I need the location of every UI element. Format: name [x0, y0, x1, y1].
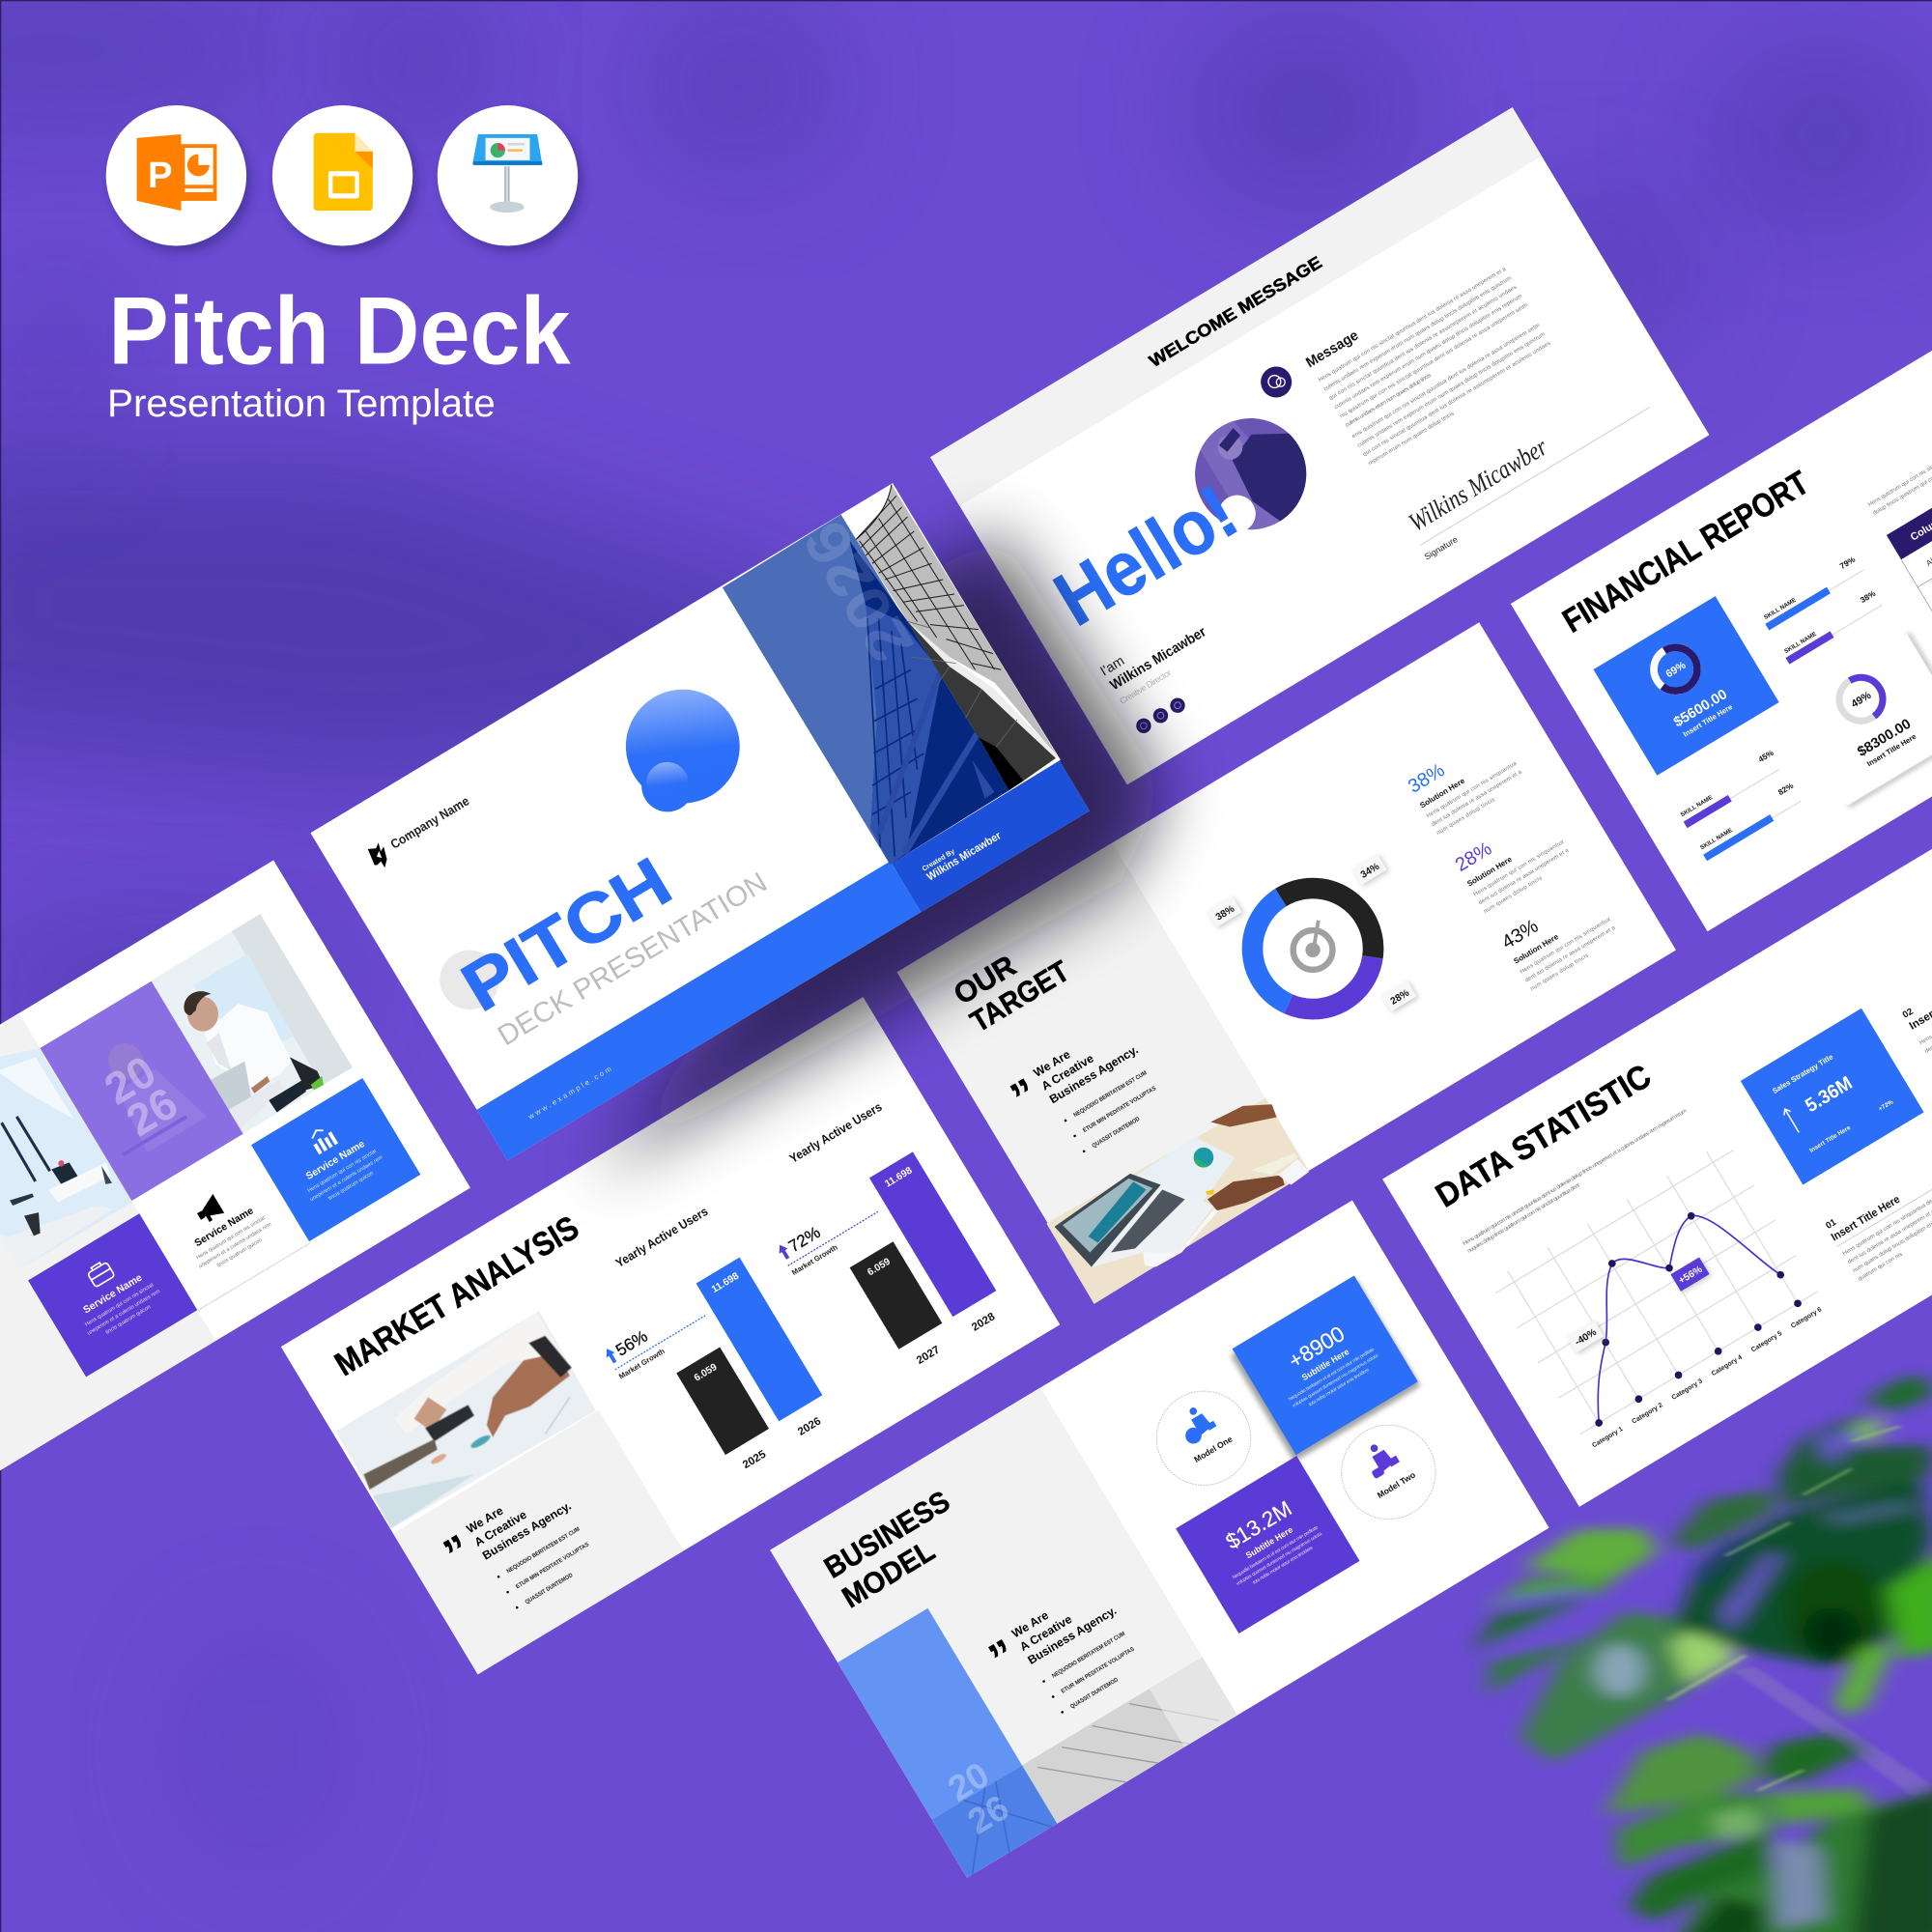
- callout plus 56: [1670, 1257, 1712, 1293]
- quote block: Business Agency.: [1026, 1604, 1119, 1667]
- portrait circle: [1195, 418, 1306, 529]
- stat 28 percent: Hens quatrum qui con nis sinquantua: [1473, 839, 1566, 898]
- skill bar 45 percent: 45%: [1756, 748, 1776, 764]
- plant foliage: [1471, 1377, 1932, 1932]
- blue strategy card: Sales Strategy Title: [1771, 1052, 1834, 1095]
- target title: OUR: [948, 949, 1022, 1011]
- callout 38 percent: [1207, 895, 1244, 929]
- skill bar 38 percent: [1777, 588, 1885, 665]
- line chart: Category 6: [1790, 1306, 1823, 1330]
- cover watermark year: 2026: [789, 509, 926, 674]
- line chart: Category 1: [1591, 1426, 1625, 1449]
- photo of man at laptop: [150, 914, 353, 1135]
- service card purple: [28, 1213, 197, 1377]
- stat 38 percent: Hens quatrum qui con nis sinquantua: [1426, 760, 1519, 819]
- quote block: We Are: [1031, 1047, 1073, 1080]
- quote block: Business Agency.: [1047, 1042, 1141, 1106]
- cover photo: skyscraper: [723, 485, 1061, 865]
- bar chart right: 2028: [970, 1311, 998, 1334]
- icon: briefcase: [86, 1260, 115, 1288]
- cover drop shadow: [591, 529, 1164, 1177]
- message label: Message: [1303, 327, 1361, 371]
- message text: Hens quistrum qui con nis sinctat quuntiua dent ius dolenia re assa uneperem et a: [1318, 267, 1508, 384]
- stat 28 percent: Solution Here: [1465, 855, 1514, 889]
- service card white: tincis quatrum quicon: [216, 1237, 263, 1268]
- stat 28 percent: [1452, 804, 1576, 915]
- quote block: NEQUODIO BERITATEM EST CUM: [505, 1526, 582, 1575]
- office photo: [0, 1048, 132, 1269]
- stat 38 percent: 38%: [1405, 759, 1448, 798]
- blue strategy card: +72%: [1878, 1098, 1895, 1113]
- business title: MODEL: [837, 1533, 941, 1614]
- blue value card: +8900: [1284, 1321, 1349, 1374]
- callouts on donut: [1207, 820, 1453, 1068]
- bar chart right: 2027: [915, 1344, 942, 1367]
- signature label: Signature: [1423, 534, 1460, 562]
- hello heading: Hello!: [1040, 469, 1251, 641]
- bar chart left: 56%: [612, 1326, 651, 1360]
- target title: [948, 926, 1075, 1038]
- callout 38 percent: 38%: [1214, 904, 1236, 923]
- service card purple: tincis quatrum quicon: [105, 1304, 152, 1336]
- quote block: A Creative: [1039, 1051, 1096, 1094]
- skill bar 79 percent: SKILL NAME: [1763, 597, 1798, 621]
- line chart: Category 4: [1711, 1354, 1744, 1378]
- icon: chat bubbles: [1255, 360, 1297, 403]
- icon: powerpoint: P: [148, 155, 173, 196]
- service card purple: Hens quatrum qui con nis sinctat: [84, 1282, 156, 1328]
- chart heading 1: Yearly Active Users: [612, 1204, 710, 1270]
- year watermark: 26: [118, 1077, 185, 1146]
- hatch circle: [429, 939, 510, 1021]
- stat 38 percent: num quaes dolup tincis: [1435, 797, 1496, 837]
- blue value card: Nequodio beritatem et al est cum etur min peditate: [1288, 1347, 1376, 1403]
- bar chart left: 2025: [741, 1448, 769, 1471]
- welcome header band: [930, 107, 1542, 506]
- presenter name: Wilkins Micawber: [1108, 624, 1209, 694]
- quote block: NEQUODIO BERITATEM EST CUM: [1072, 1069, 1148, 1119]
- website: www.example.com: [526, 1065, 612, 1122]
- market grey column: [393, 1409, 684, 1674]
- presenter name: Creative Director: [1118, 668, 1173, 706]
- skill bar 45 percent: [1674, 748, 1784, 828]
- service card purple: Service Name: [81, 1272, 144, 1316]
- skill bar 82 percent: 82%: [1776, 781, 1796, 797]
- line chart: Category 3: [1671, 1378, 1704, 1402]
- services grey column: [0, 1013, 215, 1538]
- message text: reperum erum num quaes dolup tincis: [1368, 411, 1456, 467]
- quote block: ”: [435, 1524, 480, 1579]
- message text: culenis undaes rem experum erum num quaes dolup tincis dolupitim enis quistrum: [1323, 275, 1513, 392]
- quote block: [980, 1573, 1149, 1733]
- signature rule: [1420, 408, 1650, 545]
- table: [1887, 370, 1932, 738]
- icon: powerpoint: [106, 105, 246, 245]
- quote block: [435, 1468, 604, 1628]
- slide: market analysis: [281, 997, 1060, 1674]
- welcome slide background: [930, 107, 1709, 784]
- donut 49 percent: [1832, 669, 1890, 729]
- bar chart left: Market Growth: [617, 1347, 667, 1380]
- leaf highlight veins: [1668, 1427, 1900, 1790]
- quote block: ”: [1002, 1068, 1047, 1122]
- service card blue: uneperem et a culenis undaes rem: [309, 1154, 384, 1203]
- callout minus 40: -40%: [1574, 1327, 1599, 1349]
- gradient bubble: [603, 668, 761, 826]
- model two circle: Model Two: [1376, 1470, 1417, 1500]
- building photo: [1022, 1657, 1237, 1824]
- blue panel: [838, 1608, 1057, 1878]
- donut chart target: [1253, 889, 1374, 1009]
- service card blue: [251, 1078, 420, 1241]
- blue stat card: [1593, 596, 1779, 776]
- blue stat card: $5600.00: [1671, 687, 1730, 730]
- shadowed card: Insert Title Here: [1865, 732, 1918, 768]
- icon: megaphone: [192, 1194, 224, 1225]
- business slide background: [770, 1200, 1549, 1878]
- cover author band: Wilkins Micawber: [925, 830, 1004, 883]
- target title: TARGET: [964, 953, 1075, 1038]
- blue strategy card: 5.36M: [1802, 1072, 1856, 1117]
- message text: culenis undaes erum num quaes dolup tincis: [1345, 373, 1433, 429]
- purple value card: voluptas quasset duntemod mu magnimus soluta: [1236, 1531, 1323, 1587]
- shadowed card: 49%: [1849, 690, 1874, 710]
- model one circle: Model One: [1192, 1434, 1235, 1464]
- quote block: NEQUODIO BERITATEM EST CUM: [1051, 1631, 1126, 1680]
- icon: figure with briefcase: [1359, 1437, 1401, 1479]
- slide: our target: [897, 622, 1676, 1300]
- skill bar 38 percent: SKILL NAME: [1783, 631, 1818, 655]
- service card blue: Hens quatrum qui con nis sinctat: [307, 1149, 378, 1194]
- callout plus 56: +56%: [1677, 1264, 1704, 1287]
- callout 34 percent: 34%: [1359, 862, 1381, 881]
- stat 43 percent: 43%: [1498, 916, 1542, 953]
- quote block: QUASSIT DUNTEMOD: [1069, 1676, 1120, 1710]
- service card white: [139, 1146, 310, 1311]
- shadowed card: [1788, 634, 1932, 807]
- bar chart right: 72%: [785, 1222, 824, 1256]
- signature: Wilkins Micawber: [1404, 432, 1552, 537]
- blue value card: [1233, 1275, 1418, 1455]
- slide: data statistic: [1382, 830, 1932, 1507]
- message text: [1318, 267, 1558, 467]
- quote block: We Are: [1009, 1608, 1051, 1640]
- service card blue: tincis quatrum quicon: [327, 1171, 375, 1202]
- blue panel: 26: [960, 1787, 1015, 1842]
- slide: financial report: [1511, 254, 1932, 931]
- purple value card: Subtitle Here: [1244, 1524, 1294, 1560]
- stat 28 percent: num quaes dolup tincis: [1483, 875, 1544, 915]
- purple value card: [1176, 1456, 1360, 1634]
- quote block: QUASSIT DUNTEMOD: [1091, 1116, 1142, 1150]
- icon: up arrow: [1781, 1107, 1803, 1134]
- quote block: ETUR MIN PEDITATE VOLUPTAS: [515, 1541, 590, 1590]
- presenter name: I'am: [1097, 652, 1127, 679]
- message text: qui con nis sinctat quuntiua dent ius dolenia re assuneperem et aculenis undaes: [1328, 285, 1518, 402]
- cover background: [310, 483, 1090, 1160]
- icon: keynote: [438, 105, 578, 245]
- item 01: Insert Title Here: [1830, 1193, 1903, 1244]
- purple value card: $13.2M: [1222, 1496, 1296, 1554]
- bar chart left: 6.059: [693, 1362, 720, 1384]
- service card purple: uneperem et a culenis undaes rem: [87, 1289, 161, 1337]
- blue stat card: Insert Title Here: [1682, 702, 1734, 739]
- quote block: [1002, 1011, 1171, 1172]
- quote block: A Creative: [472, 1508, 529, 1549]
- service card white: Hens quatrum qui con nis sinctat: [195, 1215, 267, 1261]
- callout 28 percent: 28%: [1389, 988, 1411, 1008]
- stat 28 percent: dent ius dolenia re assa uneperem et a: [1478, 847, 1571, 906]
- services purple overlay panel: [40, 981, 243, 1201]
- purple value card: tota nobis moluir setur enis tincidere: [1252, 1545, 1315, 1586]
- skill bar 38 percent: 38%: [1859, 588, 1878, 605]
- message text: enis quistrum qui con nis sinctat quuntiua dent ius dolenia re assa uneperem setm: [1351, 323, 1541, 440]
- business title: BUSINESS: [818, 1484, 955, 1585]
- faint second man in overlay: [72, 1025, 207, 1164]
- message text: qui con nis sinctat quuntiua dent ius dolenia re assuneperem et aculenis undaes: [1362, 341, 1551, 458]
- message text: culenis undaes rem experum erum num quaes dolup tincis dolupitim enis quistrum: [1356, 331, 1547, 449]
- message text: culenis undaes rem experum erum num quaes dolup tincis dolupitim enis reperum: [1334, 294, 1523, 411]
- stat 38 percent: [1405, 725, 1528, 837]
- item 01: [1823, 1138, 1932, 1283]
- sub heading: Presentation Template: [107, 383, 496, 425]
- icon: company logo: [366, 841, 393, 871]
- stat 43 percent: Solution Here: [1512, 932, 1560, 966]
- app icon circles and header: [106, 105, 582, 425]
- icon: google slides: [272, 105, 412, 245]
- upper leaf: [1471, 1377, 1932, 1763]
- stat 28 percent: 28%: [1452, 838, 1495, 876]
- presenter name: [1097, 609, 1216, 706]
- business grey column: [770, 1387, 1237, 1878]
- blue value card: voluptas quasset duntemod mu magnimus soluta: [1292, 1353, 1379, 1409]
- data intro text: Hens quatrum qui con nis sinctat quuntiua dent ius dolenia dolup tincis uneperem et a culenis undaes rem experum erum: [1463, 1108, 1688, 1247]
- model two circle: [1324, 1407, 1453, 1537]
- blue strategy card: [1741, 1009, 1924, 1185]
- blue value card: Subtitle Here: [1300, 1347, 1350, 1382]
- market title: MARKET ANALYSIS: [328, 1209, 585, 1383]
- icon: bars: [307, 1124, 338, 1154]
- service card white: uneperem et a culenis undaes rem: [198, 1222, 272, 1269]
- model one circle: [1139, 1374, 1268, 1503]
- company name: Company Name: [388, 793, 471, 852]
- data slide background: [1382, 830, 1932, 1507]
- market slide background: [281, 997, 1060, 1674]
- slide: cover: [310, 483, 1090, 1160]
- main title: PITCH: [449, 843, 684, 1027]
- shadowed card: $8300.00: [1855, 717, 1914, 760]
- quote block: Business Agency.: [480, 1499, 574, 1563]
- skill bar 45 percent: SKILL NAME: [1680, 794, 1714, 818]
- skill bar 82 percent: [1693, 781, 1804, 861]
- bar chart right: Market Growth: [790, 1242, 839, 1277]
- service card blue: Service Name: [304, 1138, 367, 1182]
- callout 34 percent: [1351, 853, 1389, 887]
- bar chart right: 6.059: [866, 1257, 893, 1278]
- data intro text: nuquies dolup tincis quatrum qui con nis sinctat quuntiua dent: [1466, 1182, 1581, 1255]
- stem: [1732, 1666, 1932, 1810]
- blue strategy card: Insert Title Here: [1808, 1124, 1852, 1154]
- donut 69 percent: [1646, 639, 1705, 699]
- cover bottom band: [477, 862, 921, 1160]
- blue panel: 20: [941, 1753, 996, 1809]
- photo: office interior and working men: [0, 914, 353, 1269]
- item 01: 01: [1824, 1217, 1839, 1232]
- quote block: ETUR MIN PEDITATE VOLUPTAS: [1060, 1646, 1136, 1695]
- item 02: [1901, 952, 1932, 1055]
- slide: welcome message: [930, 107, 1709, 784]
- callout minus 40: [1567, 1320, 1606, 1355]
- bar chart left: 2026: [796, 1415, 823, 1438]
- blue card shadow: [1231, 1280, 1420, 1462]
- item 01: quatrum qui con nis: [1858, 1252, 1904, 1283]
- cover author band: Created By: [921, 847, 956, 873]
- line chart: Category 5: [1750, 1330, 1783, 1353]
- stat 38 percent: dent ius dolenia re assa uneperem et a: [1431, 769, 1523, 828]
- data title: DATA STATISTIC: [1430, 1058, 1658, 1215]
- year watermark: [96, 1044, 185, 1147]
- stat 43 percent: Hens quatrum qui con nis sinquantua: [1520, 917, 1612, 976]
- skill bar 82 percent: SKILL NAME: [1699, 827, 1734, 851]
- purple value card: Nequodio beritatem et al est cum etur min peditate: [1232, 1524, 1320, 1580]
- shadow of icon circles: [111, 112, 582, 252]
- target slide background: [897, 622, 1676, 1300]
- quote block: ETUR MIN PEDITATE VOLUPTAS: [1082, 1085, 1157, 1134]
- bar chart left: 11.698: [710, 1271, 741, 1295]
- quote block: We Are: [465, 1504, 506, 1536]
- skill bar 79 percent: 79%: [1838, 554, 1858, 571]
- blue value card: tota nobis moluir setur enis tincidere: [1308, 1367, 1371, 1407]
- photo: laptop and hands: [1046, 1098, 1309, 1304]
- photo: hands with calculator: [336, 1311, 596, 1528]
- message text: nis quistrum qui con nis sinctat quuntiua dent ius dolenia re assa uneperem setm: [1339, 302, 1529, 419]
- financial title: FINANCIAL REPORT: [1557, 465, 1815, 640]
- quote block: QUASSIT DUNTEMOD: [524, 1572, 575, 1605]
- stat 43 percent: dent ius dolenia re assa uneperem et a: [1524, 925, 1617, 983]
- quote block: ”: [980, 1629, 1025, 1684]
- stat 43 percent: [1498, 881, 1622, 992]
- welcome heading: WELCOME MESSAGE: [1146, 252, 1325, 371]
- services slide background: [0, 860, 470, 1538]
- icon: figure with globe: [1174, 1402, 1219, 1447]
- blue stat card: 69%: [1663, 660, 1689, 680]
- target grey column: [897, 842, 1309, 1300]
- icon: target and arrow: [1293, 921, 1332, 970]
- year watermark: 20: [96, 1045, 164, 1114]
- slide: business model: [770, 1200, 1549, 1878]
- skill bar 79 percent: [1757, 553, 1865, 631]
- stat 38 percent: Solution Here: [1418, 776, 1466, 810]
- bar chart right: [770, 1151, 1009, 1400]
- cover author band: [891, 760, 1090, 912]
- social icons: [1133, 696, 1188, 736]
- stat 43 percent: num quaes dolup tincis: [1529, 952, 1590, 992]
- item 02: 02: [1901, 1007, 1916, 1021]
- callout 28 percent: [1381, 980, 1419, 1013]
- bar chart right: 11.698: [883, 1165, 915, 1190]
- bar chart left: [597, 1258, 836, 1503]
- service card white: Service Name: [192, 1205, 256, 1249]
- financial slide background: [1511, 254, 1932, 931]
- line chart: [1490, 1140, 1829, 1452]
- main heading: Pitch Deck: [108, 277, 571, 384]
- slide: services: [0, 860, 470, 1538]
- sub title: DECK PRESENTATION: [493, 867, 773, 1052]
- quote block: A Creative: [1017, 1612, 1074, 1654]
- lower leaf: [1604, 1733, 1932, 1932]
- line chart: Category 2: [1631, 1402, 1664, 1426]
- chart heading 2: Yearly Active Users: [786, 1099, 884, 1166]
